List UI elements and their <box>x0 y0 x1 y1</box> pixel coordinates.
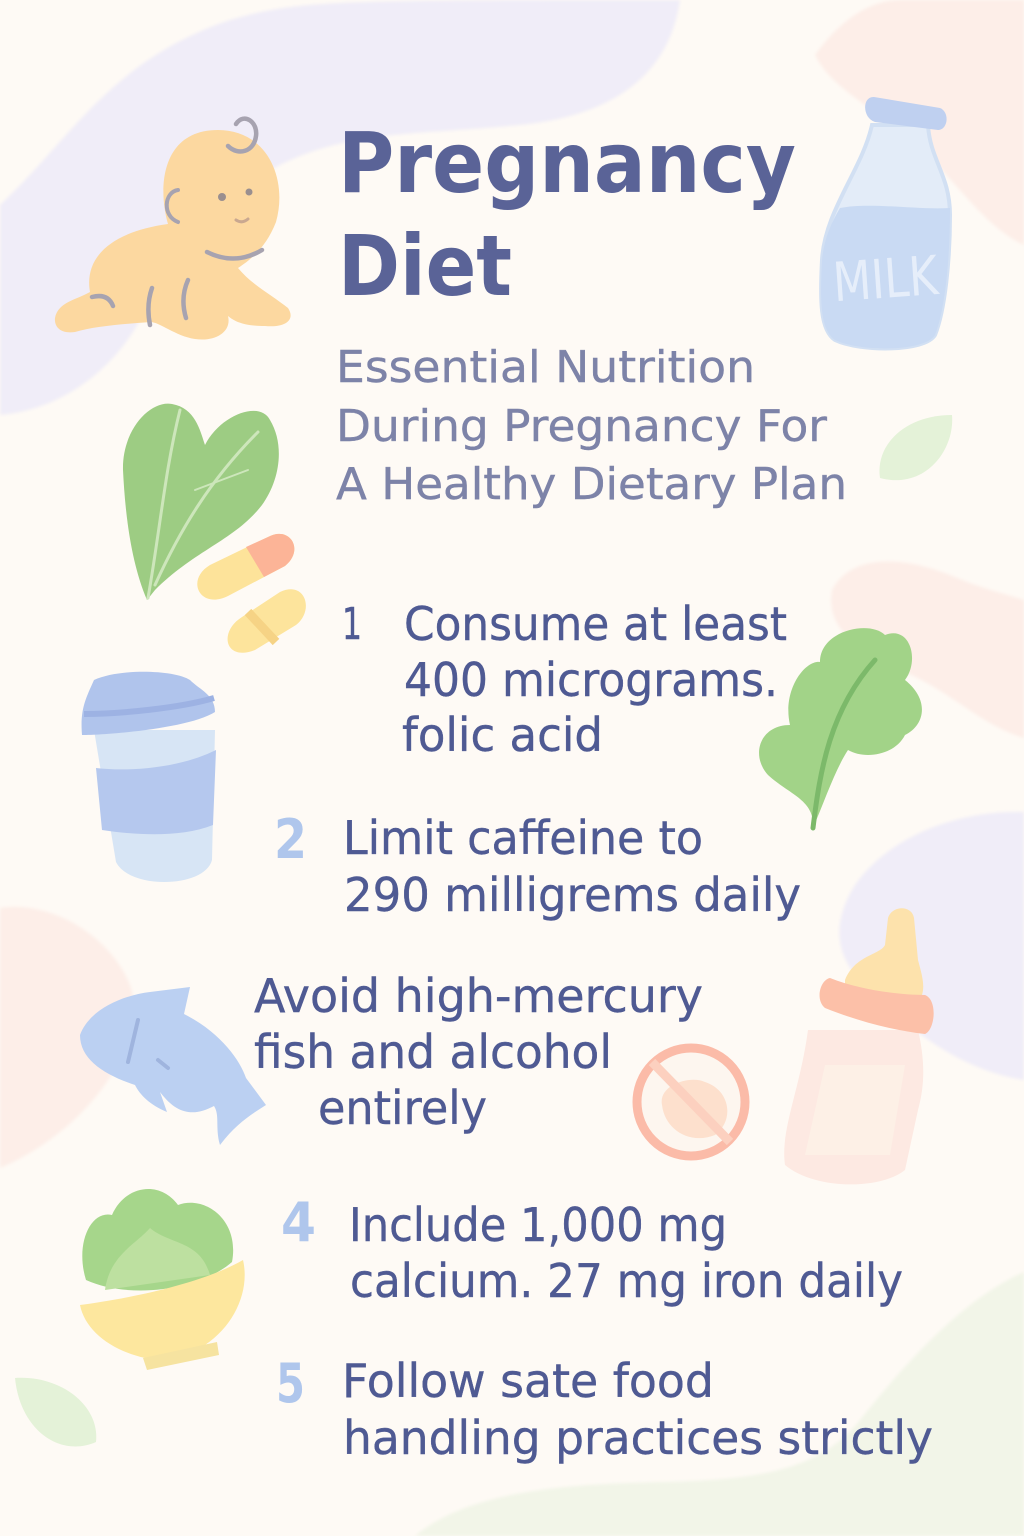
item 2: 2 <box>274 808 307 871</box>
title: Diet <box>338 217 512 315</box>
item 1: Consume at least <box>404 597 787 651</box>
item 4 <box>281 1191 903 1308</box>
item 2: 290 milligrems daily <box>344 868 801 922</box>
item 2 <box>274 808 801 922</box>
icon: baby bottle <box>784 908 934 1184</box>
icon: prohibited food <box>637 1048 745 1156</box>
item 5: Follow sate food <box>342 1354 714 1408</box>
icon: arugula leaf <box>759 628 922 828</box>
icon: fish <box>80 987 266 1145</box>
subtitle: During Pregnancy For <box>336 401 828 452</box>
icon: small leaf top right <box>879 415 952 480</box>
icon: coffee cup <box>82 672 216 882</box>
item 4: calcium. 27 mg iron daily <box>350 1254 903 1308</box>
icon: spinach leaves <box>123 404 279 600</box>
item 5: handling practices strictly <box>343 1411 933 1465</box>
icon: milk bottle <box>821 97 950 348</box>
title <box>338 114 796 315</box>
icon: milk bottle: MILK <box>831 244 941 314</box>
item 1: folic acid <box>402 708 603 762</box>
title: Pregnancy <box>338 114 796 212</box>
icon: small leaf bottom left <box>15 1378 96 1446</box>
item 4: 4 <box>281 1191 316 1254</box>
item 1: 400 micrograms. <box>404 653 778 707</box>
icon: salad bowl <box>80 1189 245 1370</box>
item 3: fish and alcohol <box>254 1025 612 1079</box>
item 3 <box>254 969 703 1135</box>
item 1 <box>342 597 787 762</box>
item 3: Avoid high-mercury <box>254 969 703 1023</box>
subtitle: A Healthy Dietary Plan <box>336 459 847 510</box>
subtitle: Essential Nutrition <box>336 342 755 393</box>
item 4: Include 1,000 mg <box>349 1198 727 1252</box>
item 5: 5 <box>276 1352 305 1415</box>
icon: pills <box>197 534 306 653</box>
icon: baby <box>55 119 291 340</box>
item 1: 1 <box>342 599 362 650</box>
item 2: Limit caffeine to <box>343 811 703 865</box>
subtitle <box>336 342 847 510</box>
item 3: entirely <box>318 1081 487 1135</box>
item 5 <box>276 1352 933 1465</box>
